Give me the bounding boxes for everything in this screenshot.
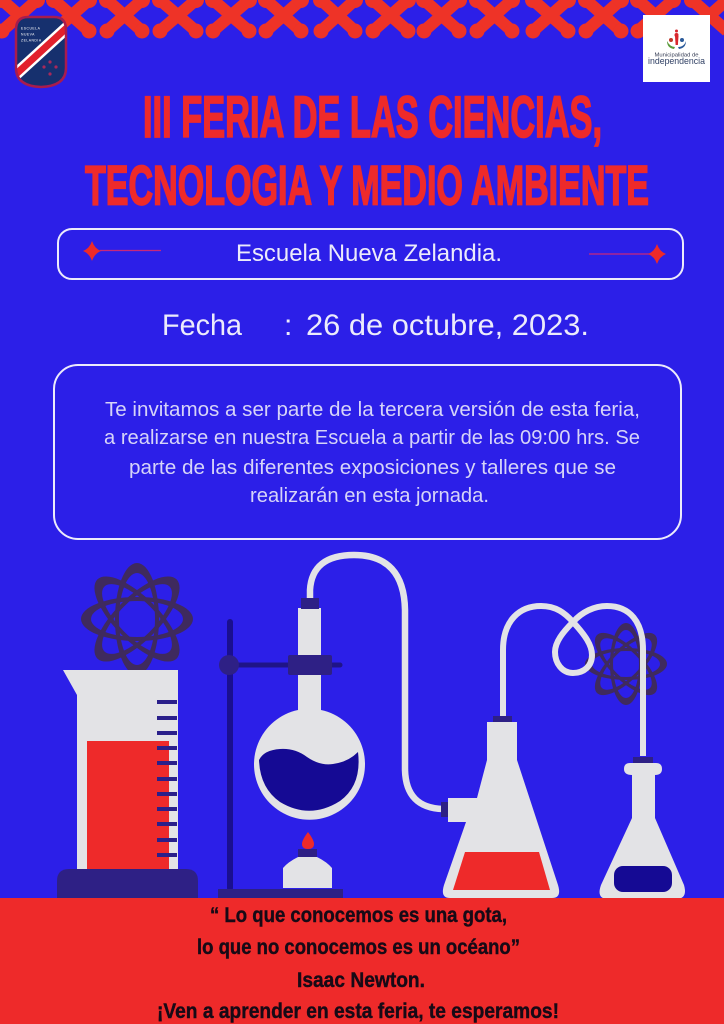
quote text: “ Lo que conocemos es una gota, — [210, 903, 507, 927]
title — [85, 85, 649, 216]
date line: Fecha — [162, 309, 242, 342]
icon: large atom — [81, 563, 193, 675]
icon: right sparkle with line — [589, 244, 666, 264]
icon: school shield logo: ZELANDIA — [21, 38, 42, 42]
icon: small atom — [585, 623, 667, 705]
icon: municipality logo card: Municipalidad de — [654, 52, 698, 58]
icon: looped tube — [503, 606, 643, 756]
icon: round bottom flask — [254, 598, 365, 820]
icon: left sparkle with line — [83, 241, 161, 261]
icon: municipality logo card: independencia — [648, 56, 706, 67]
icon: lab stand — [218, 622, 343, 898]
icon: burner — [283, 832, 332, 888]
panel: school name — [58, 229, 683, 279]
icon: tube from round flask to erlenmeyer — [310, 555, 443, 809]
school name text: Escuela Nueva Zelandia. — [236, 240, 502, 267]
invitation text: parte de las diferentes exposiciones y talleres que se — [129, 456, 616, 479]
invitation text — [104, 398, 640, 507]
icon: school shield logo: ESCUELA — [21, 26, 41, 30]
icon: school shield logo: NUEVA — [21, 32, 35, 36]
date line: : — [284, 309, 292, 342]
quote text: lo que no conocemos es un océano” — [197, 935, 520, 959]
invitation text: Te invitamos a ser parte de la tercera versión de esta feria, — [105, 398, 640, 421]
icon: school shield logo — [14, 17, 72, 87]
quote text: Isaac Newton. — [297, 968, 425, 992]
icon: erlenmeyer flask — [441, 716, 559, 898]
invitation text: a realizarse en nuestra Escuela a partir de las 09:00 hrs. Se — [104, 426, 640, 449]
quote text: ¡Ven a aprender en esta feria, te esperamos! — [157, 999, 559, 1023]
icon: municipality logo card — [643, 15, 710, 82]
panel: bottom quote band — [0, 898, 724, 1024]
decorative top pattern band — [0, 0, 724, 38]
date line — [162, 309, 589, 342]
invitation text: realizarán en esta jornada. — [250, 484, 489, 507]
quote text — [157, 903, 559, 1023]
icon: small flask — [600, 757, 685, 899]
panel: invitation — [54, 365, 681, 539]
icon: measuring beaker — [57, 670, 198, 898]
date line: 26 de octubre, 2023. — [306, 309, 589, 342]
